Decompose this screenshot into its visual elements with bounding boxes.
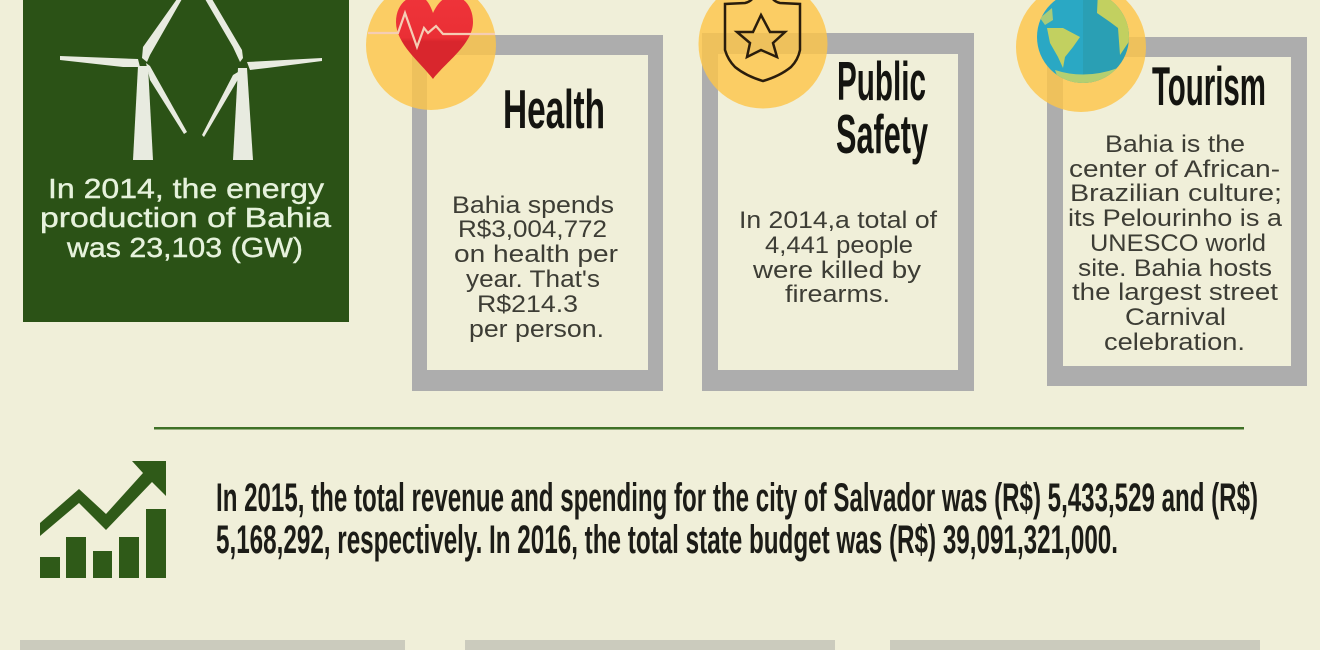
revenue text [216,476,1258,562]
tourism text: center of African- [1069,156,1280,183]
health text: year. That's [466,266,600,293]
heading: public safety: Public [837,50,926,112]
health text: R$214.3 [477,291,578,318]
public safety text: firearms. [785,281,890,308]
public safety text: In 2014,a total of [739,207,937,234]
health text: on health per [454,241,618,268]
health text: R$3,004,772 [458,216,607,243]
tourism text: Brazilian culture; [1070,180,1282,207]
tourism text: UNESCO world [1090,230,1266,257]
heading: health: Health [503,78,605,140]
tourism text: its Pelourinho is a [1068,205,1283,232]
tourism text: Carnival [1125,304,1226,331]
energy text: production of Bahia [40,202,332,233]
bottom panel middle [465,640,835,650]
tourism text: site. Bahia hosts [1078,255,1272,282]
icon: shield on circle [698,0,828,108]
heading: public safety [836,50,928,165]
icon: globe on circle [1016,0,1146,112]
health text: per person. [469,316,604,343]
energy text: was 23,103 (GW) [66,232,303,263]
bottom panel right [890,640,1260,650]
bottom panel left [20,640,405,650]
icon: growth chart [40,461,166,578]
tourism text: Bahia is the [1105,131,1245,158]
panel: health [366,0,663,391]
heading: public safety: Safety [836,103,928,165]
public safety text: were killed by [752,257,921,284]
health text [452,192,618,343]
tourism text: celebration. [1104,329,1245,356]
energy text [40,173,332,263]
tourism text: the largest street [1072,279,1278,306]
energy text: In 2014, the energy [48,173,324,204]
public safety text: 4,441 people [765,232,913,259]
health text: Bahia spends [452,192,614,219]
panel: public safety [698,0,974,391]
public safety text [739,207,937,308]
icon: wind turbines [60,0,322,160]
panel: energy [23,0,349,322]
panel: tourism [1016,0,1307,386]
tourism text [1068,131,1283,356]
icon: heart on circle [366,0,496,110]
